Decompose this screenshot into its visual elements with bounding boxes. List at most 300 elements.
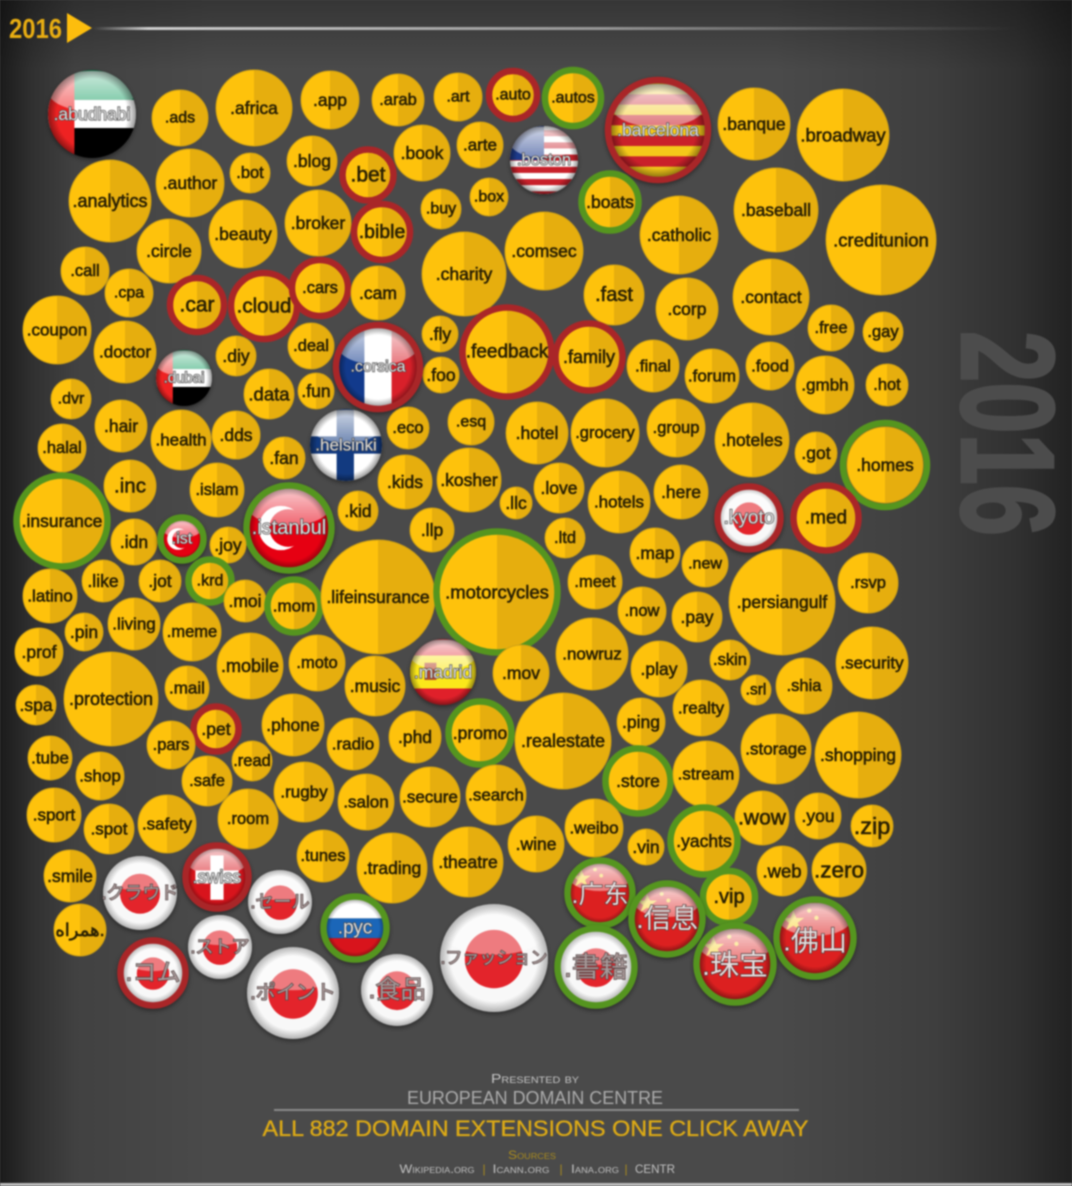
bubble .arab: .arab (379, 91, 417, 109)
bubble .ads: .ads (165, 110, 195, 126)
bubble .read (232, 741, 272, 781)
source list: | (559, 1162, 563, 1176)
bubble .catholic (640, 196, 718, 274)
bubble .halal (38, 424, 86, 472)
bubble .smile: .smile (47, 866, 93, 886)
bubble .broker (285, 190, 351, 256)
bubble .realestate: .realestate (521, 731, 605, 751)
bubble .catholic: .catholic (647, 225, 711, 245)
bubble .shopping (815, 712, 901, 798)
bubble .arte (457, 122, 503, 168)
bubble .pin (65, 613, 103, 651)
bubble .abudhabi (48, 70, 136, 158)
bubble .fun (298, 373, 334, 409)
bubble .beauty: .beauty (214, 224, 272, 244)
bubble .mom (268, 580, 320, 632)
bubble .lifeinsurance (321, 540, 435, 654)
bubble .motorcycles (436, 532, 558, 652)
bubble .trading: .trading (363, 858, 421, 878)
bubble .shop (76, 752, 124, 800)
bubble .joy: .joy (214, 535, 242, 555)
bubble .corsica (336, 325, 420, 409)
bubble .creditunion (826, 185, 936, 295)
bubble .meme (163, 603, 221, 661)
bubble .yachts (670, 808, 738, 874)
bubble .barcelona (608, 80, 708, 180)
bubble .bible (354, 204, 410, 260)
bubble .istanbul: .istanbul (252, 517, 326, 539)
bubble .广东 (568, 860, 632, 926)
bubble .pet (194, 706, 238, 752)
bubble .bot: .bot (236, 164, 264, 182)
bubble .diy (216, 336, 256, 376)
organisation name: EUROPEAN DOMAIN CENTRE (407, 1088, 663, 1108)
bubble .珠宝: .珠宝 (702, 949, 768, 982)
bubble .creditunion: .creditunion (833, 230, 929, 250)
bubble .read: .read (233, 752, 271, 770)
bubble .рус: .рус (338, 918, 372, 938)
source list: Iana.org (571, 1162, 619, 1176)
bubble .prof: .prof (21, 642, 57, 662)
bubble .like: .like (87, 571, 119, 591)
bubble .doctor: .doctor (99, 342, 151, 362)
bubble .final: .final (635, 356, 671, 376)
bubble .vip: .vip (713, 886, 745, 908)
bubble .feedback (462, 308, 552, 396)
footer divider (274, 1109, 799, 1111)
bubble .hot (866, 364, 908, 406)
bubble .now (618, 587, 666, 635)
bubble .kyoto: .kyoto (724, 508, 774, 528)
bubble .helsinki: .helsinki (315, 436, 377, 454)
bubble .llp (410, 508, 454, 552)
bubble .rsvp: .rsvp (850, 574, 886, 592)
bubble .search (466, 765, 526, 825)
bubble .skin: .skin (713, 651, 747, 669)
bubble .hotels: .hotels (594, 492, 644, 512)
bubble .dvr (51, 379, 91, 419)
sources label: Sources (508, 1148, 556, 1162)
bubble .persiangulf (729, 549, 835, 655)
bubble .kyoto (718, 486, 780, 550)
bubble .store (606, 748, 670, 814)
bubble .like (82, 560, 124, 602)
bubble .new (682, 541, 728, 587)
bubble .radio (327, 718, 379, 770)
bubble .cloud (231, 273, 297, 339)
bubble .ストア (188, 915, 252, 979)
bubble .health (151, 410, 211, 470)
bubble .spa: .spa (19, 695, 53, 715)
bubble .safety (138, 795, 196, 853)
bubble .safe (182, 756, 232, 806)
bubble .broadway: .broadway (800, 124, 886, 146)
bubble .protection (64, 652, 158, 746)
bubble .zip (851, 805, 893, 847)
bubble .rugby: .rugby (280, 782, 328, 802)
bubble .セール (248, 870, 312, 934)
bubble .contact (733, 259, 809, 335)
bubble .family: .family (563, 347, 615, 367)
bubble .gay (863, 312, 903, 352)
bubble .food: .food (751, 356, 789, 376)
bubble .love (534, 463, 584, 513)
bubble .baseball: .baseball (741, 200, 811, 220)
bubble .hoteles (715, 403, 789, 477)
bubble .moto: .moto (296, 654, 338, 672)
bubble .secure: .secure (402, 788, 458, 806)
bubble .srl (741, 675, 771, 705)
bubble .banque: .banque (722, 114, 786, 134)
bubble .prof (15, 628, 63, 676)
bubble .meet: .meet (574, 573, 616, 591)
bubble .author (156, 149, 224, 217)
bubble .inc: .inc (114, 474, 146, 498)
bubble .got (795, 432, 837, 474)
bubble .kids (378, 455, 432, 509)
bubble .vip (703, 871, 755, 923)
year heading with arrow and timeline (9, 13, 1018, 44)
bubble .vin: .vin (632, 837, 660, 857)
bubble .family (556, 324, 622, 390)
bubble .new: .new (688, 556, 722, 572)
bubble .joy (210, 527, 246, 563)
bubble .insurance (16, 476, 108, 566)
bubble .idn: .idn (120, 532, 148, 552)
bubble .shopping: .shopping (820, 745, 896, 765)
bubble .play (631, 641, 687, 697)
bubble .zero (812, 843, 866, 897)
bubble .ping: .ping (622, 712, 660, 732)
bubble .art: .art (446, 88, 470, 106)
bubble .食品 (361, 954, 433, 1026)
bubble .safe: .safe (189, 772, 225, 790)
bubble .vin (628, 829, 664, 865)
bubble .kid: .kid (344, 501, 372, 521)
bubble .rsvp (838, 553, 898, 613)
bubble .ポイント: .ポイント (250, 981, 336, 1004)
bubble .comsec: .comsec (511, 241, 577, 261)
bubble .bot (230, 153, 270, 193)
bubble .theatre (433, 827, 503, 897)
bubble .nowruz (556, 618, 628, 690)
bubble .circle (137, 219, 201, 283)
bubble .moi: .moi (228, 591, 262, 611)
bubble .coupon (23, 296, 91, 364)
bubble .banque (718, 88, 790, 160)
bubble .esq: .esq (456, 414, 486, 430)
bubble .storage (741, 714, 811, 784)
bubble .tunes: .tunes (301, 847, 345, 865)
bubble .spot (84, 804, 134, 854)
source list: Icann.org (492, 1162, 550, 1176)
bubble .hoteles: .hoteles (721, 430, 783, 450)
bubble .deal: .deal (293, 337, 329, 355)
bubble .book (394, 125, 450, 181)
bubble .pay: .pay (680, 607, 714, 627)
bubble .car: .car (179, 294, 215, 316)
bubble .data (244, 369, 294, 419)
bubble .charity (422, 232, 506, 316)
bubble .box: .box (474, 188, 504, 206)
bubble .cloud: .cloud (237, 294, 291, 318)
bubble .ファッション: .ファッション (441, 948, 547, 968)
bubble .mobile (217, 633, 283, 699)
bubble .meme: .meme (167, 623, 217, 641)
bubble .wine: .wine (516, 834, 556, 854)
bubble .group (647, 399, 705, 457)
bubble .islam: .islam (195, 481, 239, 499)
bubble .fan (263, 437, 305, 479)
bubble .cpa (105, 269, 153, 317)
bubble Arabic .shabaka: همراه. (55, 920, 105, 941)
bubble .car (170, 278, 224, 332)
bubble .mom: .mom (273, 596, 315, 616)
bubble .食品: .食品 (369, 976, 425, 1004)
bubble .web (757, 846, 807, 896)
bubble .cam (351, 266, 405, 320)
bubble .search: .search (468, 786, 524, 804)
bubble .gmbh: .gmbh (801, 376, 849, 394)
bubble .africa (216, 70, 292, 146)
bubble .free: .free (814, 319, 848, 337)
bubble .珠宝 (696, 926, 774, 1002)
bubble .stream (673, 741, 739, 807)
bubble .セール: .セール (250, 892, 310, 912)
bubble .信息 (632, 884, 702, 954)
bubble .sport (27, 788, 81, 842)
bubble .dvr: .dvr (58, 390, 85, 408)
bubble .corp (656, 278, 718, 340)
bubble .author: .author (163, 173, 217, 193)
bubble .广东: .广东 (572, 881, 628, 909)
bubble .cars: .cars (302, 279, 338, 297)
footer headline: ALL 882 DOMAIN EXTENSIONS ONE CLICK AWAY (262, 1116, 809, 1141)
bubble .food (746, 342, 794, 390)
bubble .abudhabi: .abudhabi (54, 104, 130, 124)
bubble .krd: .krd (197, 572, 223, 590)
bubble .music (345, 656, 405, 716)
bubble .jot: .jot (148, 571, 172, 591)
bubble .contact: .contact (740, 287, 802, 307)
bubble .cam: .cam (359, 283, 397, 303)
bubble .art (434, 73, 482, 121)
bubble Arabic .shabaka (54, 904, 106, 956)
source list: Wikipedia.org (400, 1162, 474, 1176)
bubble .コム: .コム (126, 960, 180, 986)
bubble .gmbh (796, 356, 854, 414)
bubble .phd (389, 711, 441, 763)
bubble .ping (617, 698, 665, 746)
bubble .corp: .corp (668, 299, 706, 319)
bubble .moi (224, 580, 266, 622)
bubble .radio: .radio (332, 734, 374, 754)
bubble .boston: .boston (517, 151, 571, 169)
bubble .skin (710, 640, 750, 680)
bubble .ist (160, 518, 204, 560)
bubble .phd: .phd (398, 727, 432, 747)
bubble .kid (338, 491, 378, 531)
bubble .pay (672, 592, 722, 642)
bubble .foo: .foo (426, 365, 456, 385)
bubble .tunes (297, 830, 349, 882)
bubble .fly: .fly (429, 324, 451, 344)
bubble .fast: .fast (595, 284, 633, 306)
bubble .kosher (437, 448, 501, 512)
bubble .med (794, 486, 858, 550)
bubble .weibo: .weibo (569, 818, 619, 838)
bubble .music: .music (350, 676, 401, 696)
bubble .dds: .dds (219, 425, 253, 445)
bubble .hair: .hair (104, 416, 138, 436)
bubble .helsinki (310, 409, 382, 481)
bubble .bible: .bible (359, 221, 405, 243)
bubble .mail: .mail (169, 678, 205, 698)
bubble .realestate (515, 693, 611, 789)
bubble .rugby (274, 762, 334, 822)
bubble .homes: .homes (856, 455, 914, 475)
source list: | (482, 1162, 486, 1176)
bubble .kosher: .kosher (440, 470, 498, 490)
bubble .motorcycles: .motorcycles (445, 582, 549, 602)
bubble .salon: .salon (343, 792, 389, 812)
bubble .barcelona: .barcelona (617, 120, 699, 140)
bubble .boats (582, 174, 638, 230)
bubble .pin: .pin (70, 622, 98, 642)
source list: | (624, 1162, 628, 1176)
bubble .doctor (94, 321, 156, 383)
bubble .broadway (797, 89, 889, 181)
bubble .islam (190, 463, 244, 517)
bubble .shia: .shia (787, 677, 822, 695)
bubble .smile (44, 850, 96, 902)
bubble .shop: .shop (79, 766, 121, 786)
bubble .security (836, 627, 908, 699)
source list: CENTR (635, 1162, 675, 1176)
bubble .circle: .circle (146, 241, 192, 261)
bubble .krd (188, 560, 232, 602)
bubble .kids: .kids (387, 472, 423, 492)
bubble .group: .group (653, 419, 699, 437)
bubble .blog (287, 136, 337, 186)
bubble .рус (324, 896, 386, 960)
bubble .ストア: .ストア (190, 937, 250, 957)
bubble .yachts: .yachts (676, 831, 732, 851)
bubble .佛山: .佛山 (783, 926, 847, 956)
bubble .you (795, 793, 841, 839)
bubble .theatre: .theatre (438, 852, 498, 872)
bubble .web: .web (762, 860, 802, 882)
bubble .phone (262, 694, 324, 756)
bubble .baseball (734, 168, 818, 252)
bubble .room (218, 789, 278, 849)
bubble .fly (422, 316, 458, 352)
bubble .fan: .fan (269, 448, 299, 468)
bubble .forum: .forum (688, 366, 736, 386)
bubble .call: .call (70, 262, 100, 280)
bubble .deal (288, 323, 334, 369)
bubble .inc (104, 460, 156, 512)
bubble .analytics: .analytics (72, 191, 148, 211)
bubble .charity: .charity (436, 264, 492, 284)
bubble .halal: .halal (42, 439, 82, 457)
bubble .stream: .stream (678, 764, 734, 784)
bubble .realty (673, 680, 729, 736)
bubble .promo (448, 702, 512, 764)
bubble .broker: .broker (291, 213, 345, 233)
bubble .latino (23, 569, 77, 623)
bubble .istanbul (246, 486, 332, 570)
bubble .ads (152, 90, 208, 146)
bubble .swiss (186, 846, 248, 908)
bubble .coupon: .coupon (27, 320, 87, 340)
bubble .blog: .blog (293, 151, 331, 171)
bubble .llc (500, 487, 532, 519)
bubble .phone: .phone (266, 715, 320, 735)
bubble .got: .got (801, 443, 831, 463)
bubble .dubai: .dubai (164, 370, 204, 386)
source list (400, 1162, 675, 1176)
bubble .secure (400, 767, 460, 827)
bubble .persiangulf: .persiangulf (737, 592, 827, 612)
bubble .feedback: .feedback (466, 342, 549, 362)
bubble .gay: .gay (867, 323, 899, 341)
bubble .spa (16, 685, 56, 725)
bubble .nowruz: .nowruz (562, 644, 622, 664)
bubble .boats: .boats (586, 192, 634, 212)
bubble .app (301, 71, 359, 129)
presented by: Presented by (491, 1071, 579, 1086)
bubble .forum (685, 349, 739, 403)
footer credits (262, 1071, 809, 1176)
bubble .madrid (410, 639, 476, 705)
bubble .eco (387, 407, 429, 449)
bubble .pars (147, 721, 195, 769)
bubble .call (61, 247, 109, 295)
bubble .ポイント (247, 947, 339, 1039)
bubble .living: .living (112, 614, 156, 634)
bubble .shia (776, 658, 832, 714)
bubble .play: .play (641, 659, 678, 679)
bubble .jot (139, 560, 181, 602)
bubble .safety: .safety (142, 814, 193, 834)
bubble .autos: .autos (551, 90, 595, 106)
bubble .security: .security (840, 654, 904, 672)
bubble .madrid: .madrid (414, 662, 472, 682)
bubble .fun: .fun (301, 381, 331, 401)
bubble .fast (584, 265, 644, 325)
bubble .コム (120, 940, 186, 1006)
bubble .salon (338, 774, 394, 830)
bubble .佛山 (776, 900, 854, 976)
bubble .beauty (209, 200, 277, 268)
bubble .room: .room (227, 810, 269, 828)
bubble .zero: .zero (814, 858, 864, 882)
bubble .bet (342, 150, 394, 200)
bubble .meet (568, 555, 622, 609)
bubble .クラウド (101, 856, 179, 930)
bubble .health: .health (155, 430, 207, 450)
bubble .store: .store (616, 771, 660, 791)
bubble .swiss: .swiss (192, 867, 242, 887)
bubble .tube (28, 736, 72, 780)
bubble .srl: .srl (746, 682, 766, 698)
bubble .bet: .bet (350, 164, 386, 186)
bubble .hotel (506, 402, 568, 464)
bubble .buy: .buy (426, 200, 456, 218)
bubble .buy (421, 189, 461, 229)
bubble .grocery (571, 399, 639, 467)
